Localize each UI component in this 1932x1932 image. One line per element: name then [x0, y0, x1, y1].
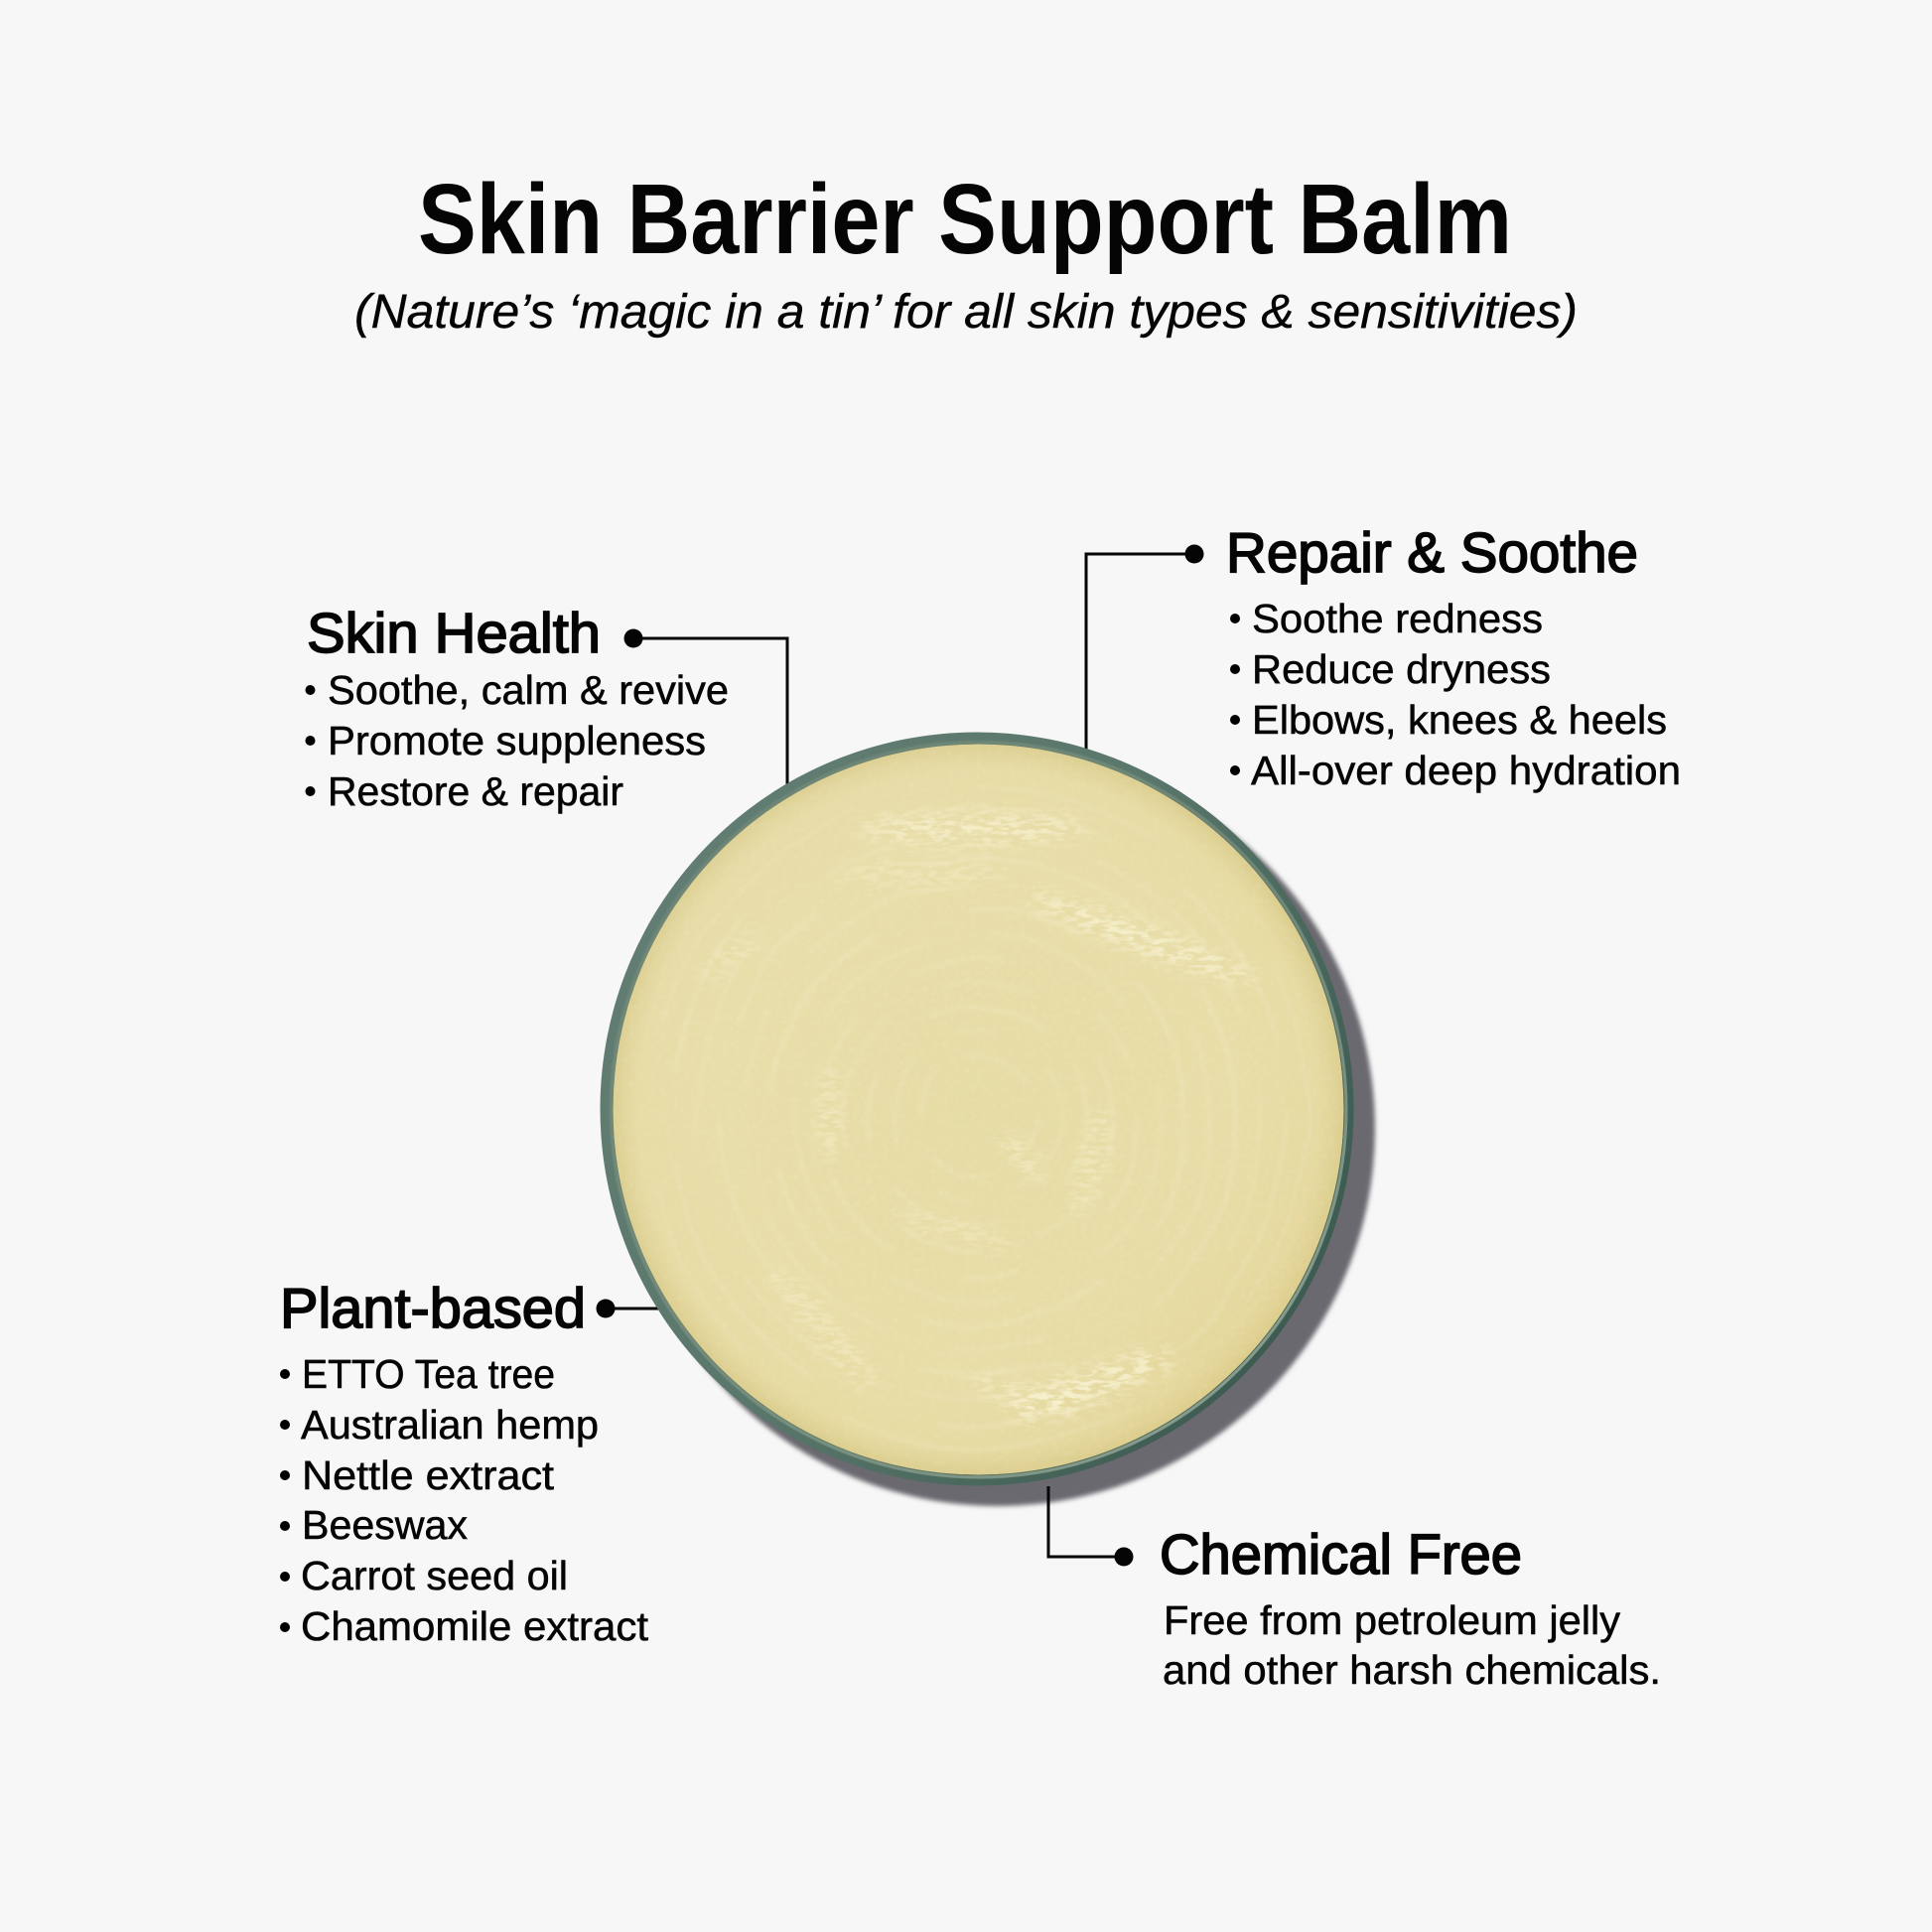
connector: skin health — [623, 629, 787, 789]
bullet list: Carrot seed oil — [301, 1553, 568, 1598]
tin rim — [600, 733, 1354, 1485]
panel: skin health — [306, 602, 729, 814]
balm inner shading — [616, 747, 1342, 1473]
bullet list — [280, 1351, 649, 1649]
heading: Skin Health — [307, 602, 601, 665]
panel: plant-based — [280, 1277, 649, 1649]
bullet list: Beeswax — [302, 1502, 468, 1548]
bullet list — [1230, 596, 1681, 793]
concentric brush marks — [1197, 1332, 1201, 1336]
bullet list: Promote suppleness — [328, 718, 706, 763]
bullet list: Reduce dryness — [1252, 646, 1551, 692]
balm surface — [613, 744, 1344, 1475]
rim light line — [611, 742, 1346, 1477]
connector: plant-based — [596, 1299, 665, 1318]
description: Free from petroleum jelly — [1164, 1597, 1620, 1643]
bullet list: All-over deep hydration — [1251, 748, 1681, 793]
connector: chemical free — [1048, 1486, 1134, 1567]
description — [1163, 1597, 1661, 1693]
balm swirl highlights — [692, 813, 1263, 1433]
tin shadow — [621, 752, 1375, 1506]
subtitle: (Nature’s ‘magic in a tin’ for all skin types & sensitivities) — [354, 286, 1578, 339]
panel: repair and soothe — [1226, 521, 1681, 793]
title: Skin Barrier Support Balm — [418, 164, 1512, 275]
bullet list: Elbows, knees & heels — [1252, 697, 1667, 743]
balm tin — [600, 733, 1375, 1506]
bullet list: Chamomile extract — [301, 1603, 649, 1649]
panel: chemical free — [1160, 1523, 1661, 1693]
description: and other harsh chemicals. — [1163, 1647, 1661, 1693]
bullet list: Soothe redness — [1252, 596, 1543, 641]
heading: Plant-based — [280, 1277, 586, 1340]
bullet list: ETTO Tea tree — [302, 1351, 555, 1397]
balm texture — [669, 834, 1303, 1432]
connector: repair and soothe — [1086, 544, 1203, 755]
bullet list: Restore & repair — [328, 768, 623, 814]
heading: Repair & Soothe — [1226, 521, 1638, 585]
heading: Chemical Free — [1160, 1523, 1522, 1587]
bullet list — [306, 667, 729, 814]
bullet list: Nettle extract — [302, 1452, 555, 1498]
bullet list: Australian hemp — [301, 1402, 599, 1448]
bullet list: Soothe, calm & revive — [328, 667, 729, 713]
